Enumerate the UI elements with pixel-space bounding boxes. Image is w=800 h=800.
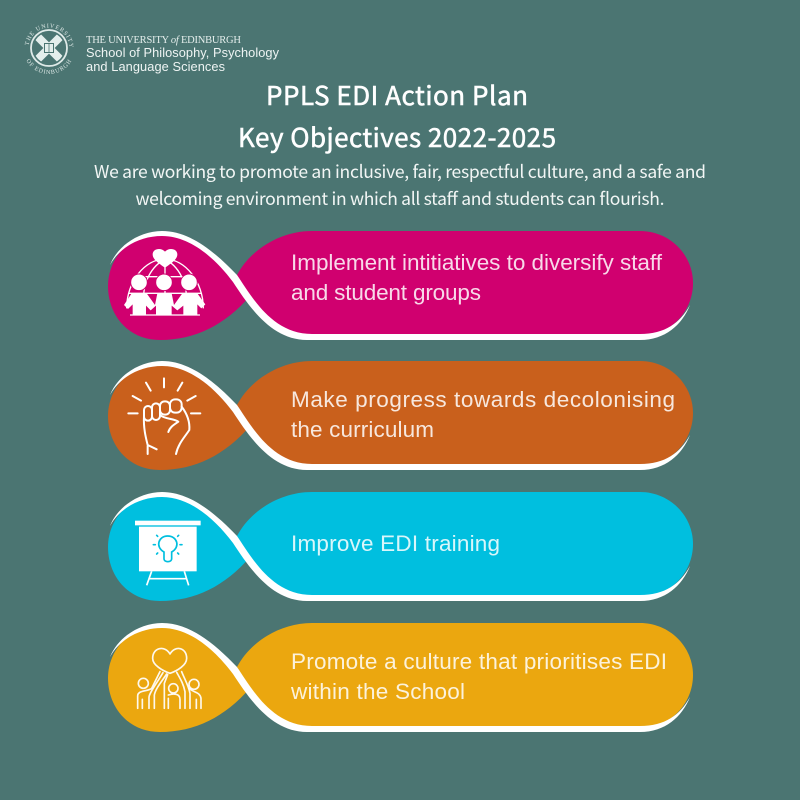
objective text (291, 387, 675, 442)
left drop (108, 494, 250, 601)
school name line 1: School of Philosophy, Psychology (86, 45, 280, 60)
white ribbon (110, 492, 690, 601)
objective text: Improve EDI training (291, 531, 500, 556)
panel: objective 4 culture (108, 623, 693, 732)
university logo and school name (24, 24, 280, 74)
icon: people under globe with heart (124, 249, 205, 315)
right pill (237, 492, 693, 597)
left drop (108, 363, 250, 470)
white ribbon (110, 623, 690, 732)
objective text: and student groups (291, 280, 481, 305)
university name: THE UNIVERSITY of EDINBURGH (86, 35, 241, 46)
objective text: Promote a culture that prioritises EDI (291, 649, 667, 674)
intro text (94, 159, 706, 211)
right pill (237, 361, 693, 466)
panel: objective 2 decolonising (108, 361, 693, 470)
title: PPLS EDI Action Plan (266, 76, 528, 113)
panel: objective 1 diversify (108, 231, 693, 340)
icon: university crest: THE UNIVERSITY (24, 24, 74, 47)
panel: objective 3 training (108, 492, 693, 601)
objective text: within the School (290, 679, 465, 704)
objective text: Implement intitiatives to diversify staff (291, 250, 663, 275)
objective text (291, 250, 663, 305)
right pill (237, 623, 693, 728)
icon: university crest: OF EDINBURGH (26, 59, 72, 74)
right pill (237, 231, 693, 336)
white ribbon (110, 231, 690, 340)
title (238, 76, 556, 155)
intro text: We are working to promote an inclusive, fair, respectful culture, and a safe and (94, 159, 706, 184)
icon: raised fist (128, 378, 200, 454)
icon: university crest (24, 24, 74, 74)
objective text: the curriculum (291, 417, 434, 442)
title: Key Objectives 2022-2025 (238, 118, 556, 155)
left drop (108, 625, 250, 732)
objective text (290, 649, 667, 704)
white ribbon (110, 361, 690, 470)
school name line 2: and Language Sciences (86, 59, 225, 74)
objective text: Make progress towards decolonising (291, 387, 675, 412)
icon: hands raising a heart (138, 648, 201, 708)
left drop (108, 233, 250, 340)
icon: presentation board with light bulb (135, 521, 201, 585)
intro text: welcoming environment in which all staff and students can flourish. (136, 186, 664, 211)
